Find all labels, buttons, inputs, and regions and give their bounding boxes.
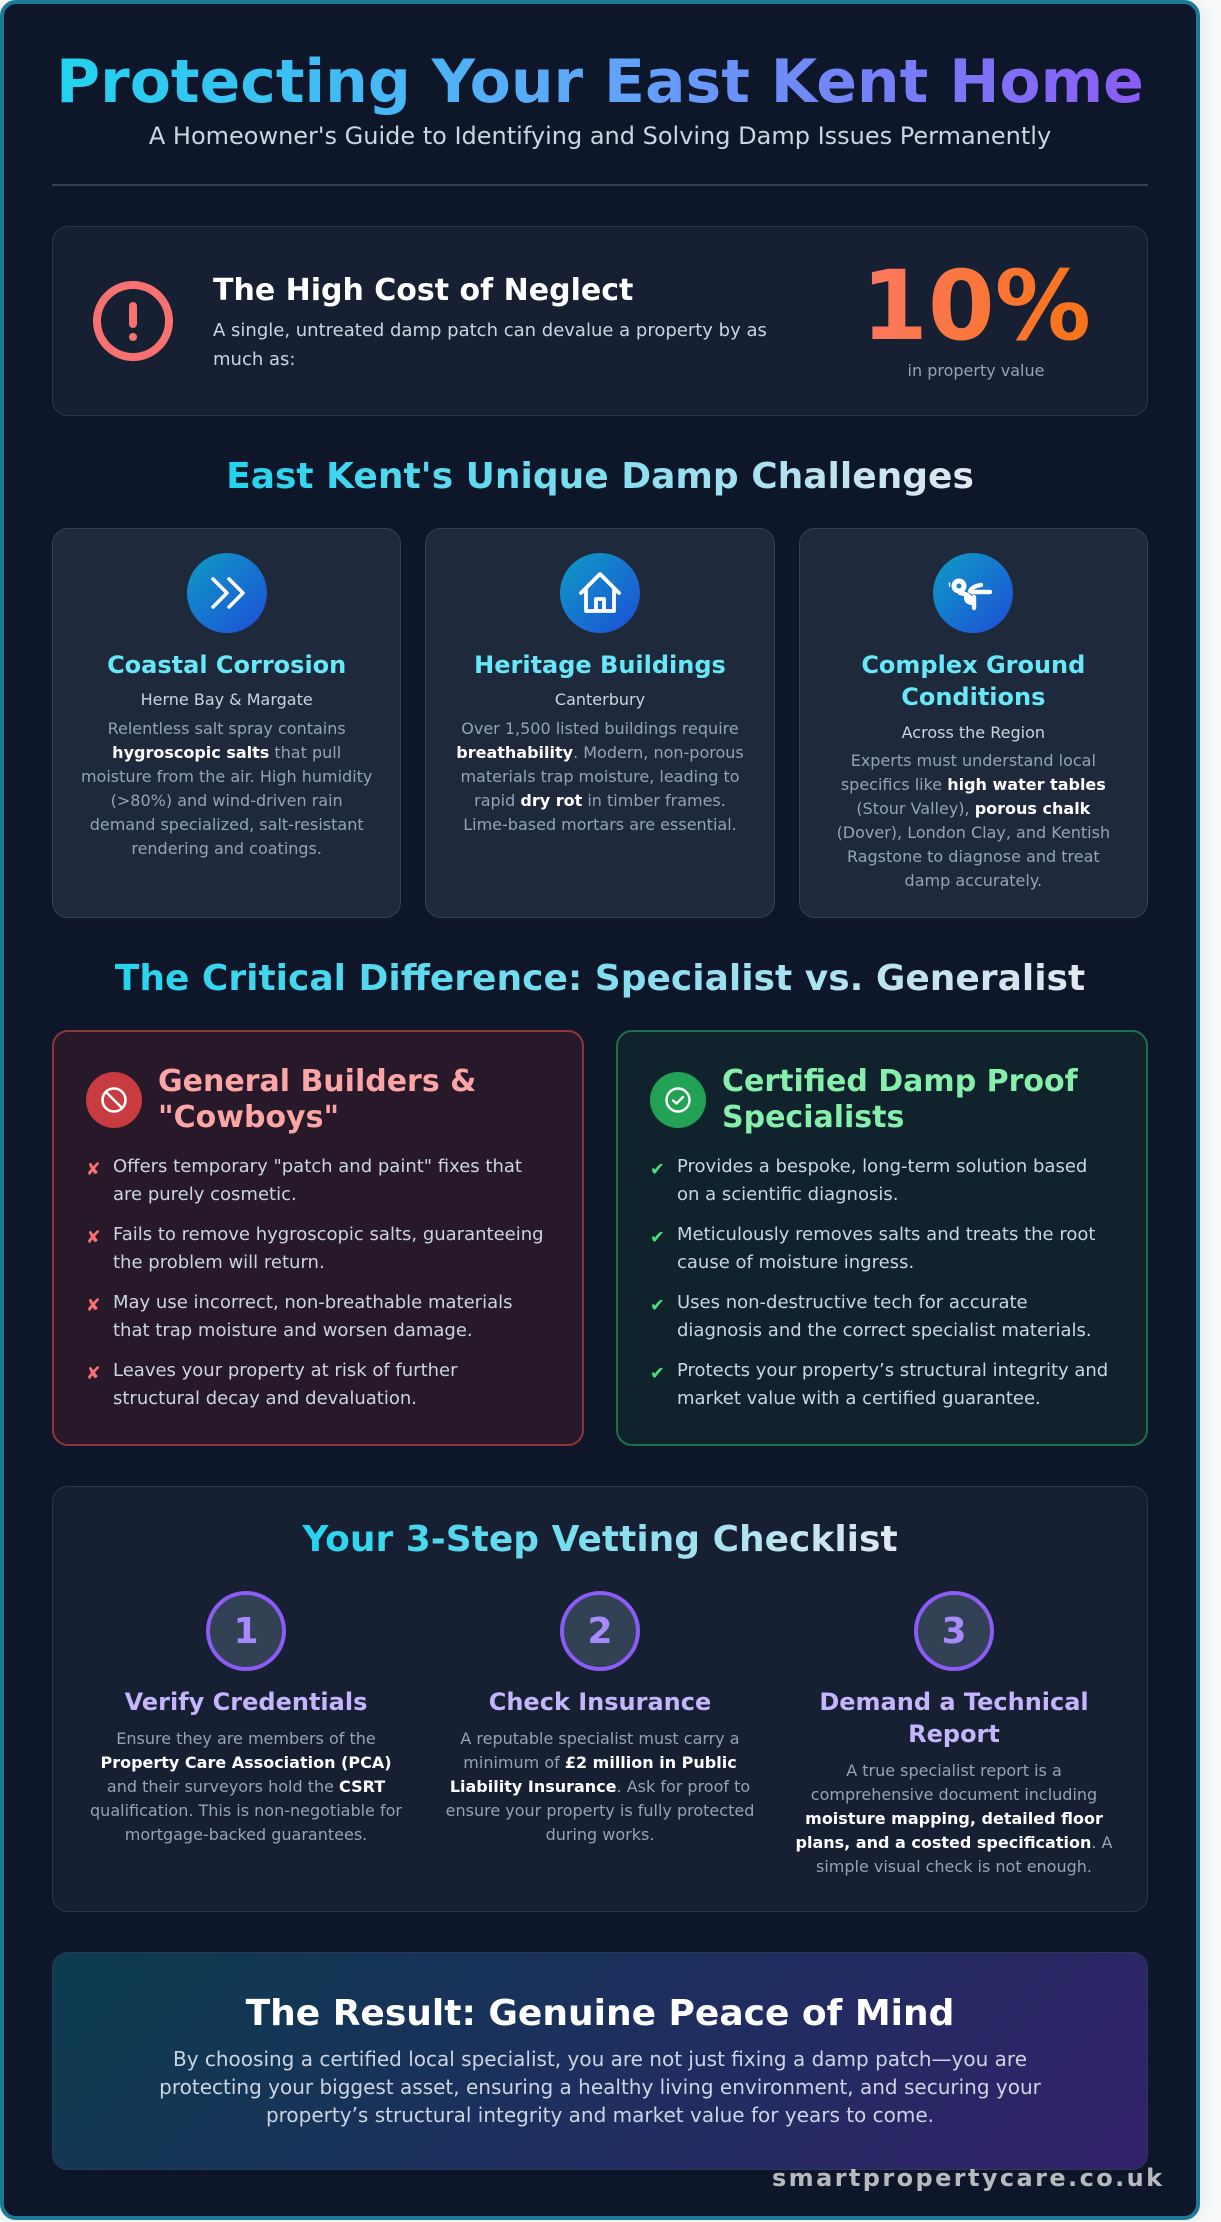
step title: Report xyxy=(908,1720,1000,1748)
card title xyxy=(861,651,1085,711)
heading: result: The Result: Genuine Peace of Mind xyxy=(246,1993,954,2034)
number 2: 2 xyxy=(587,1611,613,1652)
list: general builder failings: Leaves your property at risk of further xyxy=(113,1360,458,1381)
step text xyxy=(796,1761,1112,1876)
card body: Ragstone to diagnose and treat xyxy=(847,847,1100,866)
icon: ground squiggle xyxy=(933,553,1013,633)
step text xyxy=(446,1729,754,1844)
step text: comprehensive document including xyxy=(811,1785,1097,1804)
card body: demand specialized, salt-resistant xyxy=(90,815,364,834)
list: general builder failings: structural decay and devaluation. xyxy=(113,1388,417,1409)
card body: Lime-based mortars are essential. xyxy=(463,815,737,834)
card body: materials trap moisture, leading to xyxy=(460,767,740,786)
panel: coastal corrosion xyxy=(52,528,401,918)
step 3 xyxy=(796,1591,1112,1876)
list: general builder failings xyxy=(86,1156,544,1409)
panel: vetting checklist xyxy=(52,1486,1148,1912)
list: specialist benefits: ✔ xyxy=(650,1296,665,1316)
card title: Coastal Corrosion xyxy=(107,651,346,679)
heading: high cost of neglect: The High Cost of Neglect xyxy=(213,273,633,308)
step text: during works. xyxy=(546,1825,654,1844)
step text: A true specialist report is a xyxy=(846,1761,1062,1780)
step text: simple visual check is not enough. xyxy=(816,1857,1092,1876)
heading: certified specialists: Certified Damp Proof xyxy=(722,1064,1078,1099)
step title xyxy=(819,1688,1089,1748)
card body: rapid dry rot in timber frames. xyxy=(474,791,726,810)
card body xyxy=(837,751,1110,890)
step text: and their surveyors hold the CSRT xyxy=(107,1777,385,1796)
icon: house xyxy=(560,553,640,633)
list: general builder failings: ✘ xyxy=(86,1296,101,1316)
step text: ensure your property is fully protected xyxy=(446,1801,754,1820)
text: result: By choosing a certified local specialist, you are not just fixing a damp patch—you are xyxy=(173,2047,1027,2071)
card body: specifics like high water tables xyxy=(841,775,1106,794)
panel: heritage buildings xyxy=(425,528,775,918)
heading: vetting checklist: Your 3-Step Vetting Checklist xyxy=(302,1519,898,1560)
step title: Verify Credentials xyxy=(125,1688,367,1716)
list: general builder failings: the problem will return. xyxy=(113,1252,325,1273)
text: devaluation statement xyxy=(213,320,767,370)
card body: breathability. Modern, non-porous xyxy=(456,743,744,762)
card body: damp accurately. xyxy=(905,871,1042,890)
step text xyxy=(90,1729,402,1844)
step text: Liability Insurance. Ask for proof to xyxy=(450,1777,750,1796)
list: general builder failings: Fails to remove hygroscopic salts, guaranteeing xyxy=(113,1224,544,1245)
card body xyxy=(81,719,372,858)
card body: moisture from the air. High humidity xyxy=(81,767,372,786)
step text: mortgage-backed guarantees. xyxy=(125,1825,367,1844)
list: general builder failings: May use incorrect, non-breathable materials xyxy=(113,1292,512,1313)
icon: alert circle xyxy=(93,281,173,361)
list: general builder failings: that trap moisture and worsen damage. xyxy=(113,1320,473,1341)
list: specialist benefits: Provides a bespoke, long-term solution based xyxy=(677,1156,1087,1177)
card body: Over 1,500 listed buildings require xyxy=(461,719,739,738)
list: general builder failings: ✘ xyxy=(86,1364,101,1384)
heading: critical difference: The Critical Difference: Specialist vs. Generalist xyxy=(115,958,1085,999)
list: general builder failings: are purely cosmetic. xyxy=(113,1184,297,1205)
card body: rendering and coatings. xyxy=(131,839,322,858)
panel: certified specialists xyxy=(616,1030,1148,1446)
icon: prohibited xyxy=(86,1072,142,1128)
text: result: protecting your biggest asset, ensuring a healthy living environment, and securing your xyxy=(159,2075,1041,2099)
card body: (Stour Valley), porous chalk xyxy=(856,799,1090,818)
list: specialist benefits: on a scientific diagnosis. xyxy=(677,1184,898,1205)
card body xyxy=(456,719,744,834)
heading: challenges: East Kent's Unique Damp Challenges xyxy=(226,456,974,497)
heading: general builders: General Builders & xyxy=(158,1064,476,1099)
card body: (>80%) and wind-driven rain xyxy=(111,791,343,810)
card body: (Dover), London Clay, and Kentish xyxy=(837,823,1110,842)
step text: A reputable specialist must carry a xyxy=(460,1729,740,1748)
list: general builder failings: Offers temporary "patch and paint" fixes that xyxy=(113,1156,522,1177)
card title: Conditions xyxy=(901,683,1045,711)
card location: Herne Bay & Margate xyxy=(141,690,313,709)
card location: Canterbury xyxy=(555,690,645,709)
step text: Property Care Association (PCA) xyxy=(100,1753,392,1772)
icon: check circle xyxy=(650,1072,706,1128)
list: specialist benefits: ✔ xyxy=(650,1364,665,1384)
panel: general builders xyxy=(52,1030,584,1446)
panel: high cost of neglect xyxy=(52,226,1148,416)
step text: plans, and a costed specification. A xyxy=(796,1833,1112,1852)
number 3: 3 xyxy=(941,1611,967,1652)
heading: certified specialists: Specialists xyxy=(722,1100,904,1135)
heading: general builders xyxy=(158,1064,476,1135)
card title: Complex Ground xyxy=(861,651,1085,679)
heading: certified specialists xyxy=(722,1064,1078,1135)
step text: moisture mapping, detailed floor xyxy=(805,1809,1103,1828)
number 2 xyxy=(560,1591,640,1671)
stat caption: in property value xyxy=(908,361,1044,380)
subtitle: A Homeowner's Guide to Identifying and Solving Damp Issues Permanently xyxy=(149,122,1051,150)
list: specialist benefits: ✔ xyxy=(650,1160,665,1180)
step 1 xyxy=(90,1591,402,1844)
card location: Across the Region xyxy=(902,723,1045,742)
step title: Check Insurance xyxy=(489,1688,711,1716)
title: Protecting Your East Kent Home xyxy=(56,47,1144,117)
card title: Heritage Buildings xyxy=(474,651,726,679)
panel: result xyxy=(52,1952,1148,2170)
stat: 10 percent: 10% xyxy=(861,250,1091,362)
icon: double chevrons xyxy=(187,553,267,633)
number 1: 1 xyxy=(233,1611,259,1652)
number 1 xyxy=(206,1591,286,1671)
list: specialist benefits: ✔ xyxy=(650,1228,665,1248)
step text: Ensure they are members of the xyxy=(116,1729,376,1748)
list: specialist benefits: Protects your property’s structural integrity and xyxy=(677,1360,1108,1381)
text: devaluation statement: much as: xyxy=(213,349,295,370)
text: result: property’s structural integrity and market value for years to come. xyxy=(266,2103,934,2127)
text: devaluation statement: A single, untreated damp patch can devalue a property by as xyxy=(213,320,767,341)
step text: qualification. This is non-negotiable for xyxy=(90,1801,402,1820)
card body: Experts must understand local xyxy=(851,751,1096,770)
card body: Relentless salt spray contains xyxy=(108,719,346,738)
step text: minimum of £2 million in Public xyxy=(463,1753,737,1772)
list: specialist benefits xyxy=(650,1156,1108,1409)
number 3 xyxy=(914,1591,994,1671)
list: specialist benefits: market value with a certified guarantee. xyxy=(677,1388,1041,1409)
text: result xyxy=(159,2047,1041,2127)
list: specialist benefits: cause of moisture ingress. xyxy=(677,1252,914,1273)
list: specialist benefits: diagnosis and the correct specialist materials. xyxy=(677,1320,1092,1341)
step title: Demand a Technical xyxy=(819,1688,1089,1716)
card body: hygroscopic salts that pull xyxy=(112,743,341,762)
list: general builder failings: ✘ xyxy=(86,1228,101,1248)
list: general builder failings: ✘ xyxy=(86,1160,101,1180)
list: specialist benefits: Uses non-destructive tech for accurate xyxy=(677,1292,1028,1313)
list: specialist benefits: Meticulously removes salts and treats the root xyxy=(677,1224,1095,1245)
watermark: smartpropertycare.co.uk xyxy=(772,2164,1164,2192)
heading: general builders: "Cowboys" xyxy=(158,1100,339,1135)
panel: complex ground conditions xyxy=(799,528,1148,918)
step 2 xyxy=(446,1591,754,1844)
